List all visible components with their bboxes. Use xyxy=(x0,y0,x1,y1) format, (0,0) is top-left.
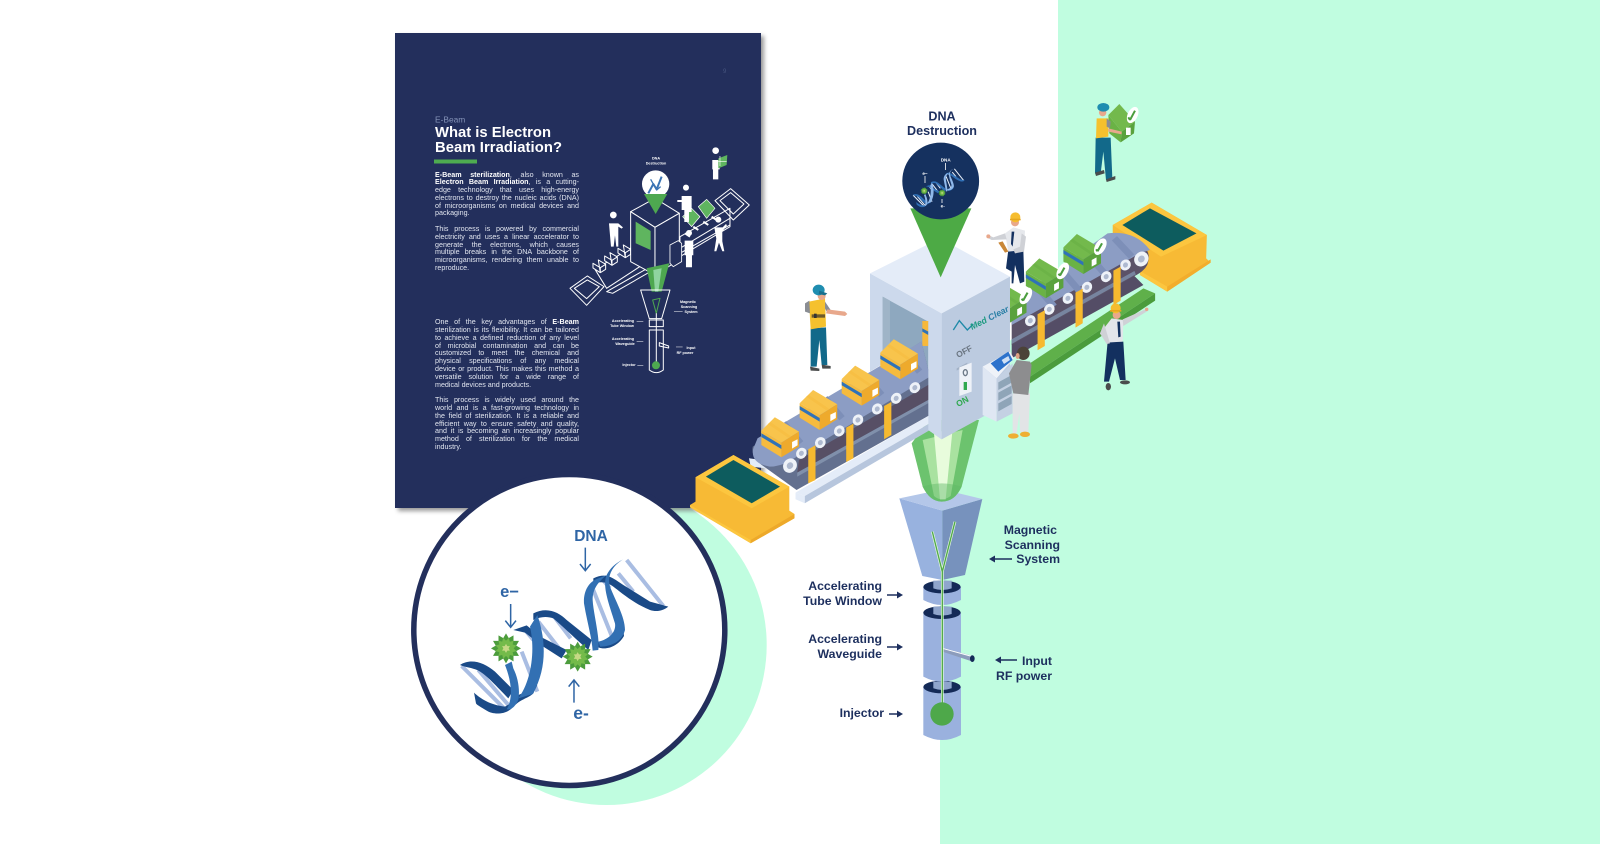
right conveyor xyxy=(989,233,1155,383)
machine labels xyxy=(954,304,1011,409)
paragraph 2: generate the electrons, which causes xyxy=(435,241,579,249)
beam path xyxy=(932,522,955,703)
paragraph 1: of microorganisms on medical devices and xyxy=(435,202,579,210)
paragraph 3: One of the key advantages of E-Beam xyxy=(435,318,579,326)
accelerator labels: Waveguide xyxy=(818,647,882,661)
DNA lens circle xyxy=(414,474,725,786)
DNA helix xyxy=(460,559,668,714)
accelerator labels: Magnetic xyxy=(1004,523,1057,537)
lens labels xyxy=(500,528,608,723)
mini helix labels xyxy=(922,158,951,208)
paragraph 4: and it is becoming an increasingly popular xyxy=(435,427,579,435)
brochure illustration labels: Destruction xyxy=(646,162,667,166)
paragraph 3: to achieve a defined reduction of any level xyxy=(435,334,579,342)
paragraph 2 xyxy=(435,225,579,272)
accelerator arrows xyxy=(887,556,1017,718)
brochure illustration labels: RF power xyxy=(677,351,694,355)
brochure heading: What is Electron xyxy=(435,125,551,141)
machine labels: Med Clear xyxy=(968,304,1011,332)
paragraph 4 xyxy=(435,396,579,451)
left bin xyxy=(690,455,794,543)
paragraph 3: medical devices and products. xyxy=(435,381,531,389)
machine front and top xyxy=(870,238,1010,439)
rail xyxy=(796,415,930,496)
accelerator labels: Tube Window xyxy=(803,594,882,608)
lens labels: e− xyxy=(500,583,519,601)
paragraph 2: microorganisms, rendering them unable to xyxy=(435,256,579,264)
DNA pin circle xyxy=(902,143,979,219)
mini helix labels: e- xyxy=(941,204,945,208)
right bin xyxy=(1113,203,1211,292)
mini helix arrows xyxy=(925,163,946,203)
accelerator labels: RF power xyxy=(996,669,1052,683)
accelerator labels: Scanning xyxy=(1005,538,1060,552)
paragraph 1: edge technology that uses high-energy xyxy=(435,186,579,194)
lens labels: DNA xyxy=(574,528,608,545)
page: brochure xyxy=(395,33,764,511)
green boxes xyxy=(1063,234,1109,274)
worker: carrying green box xyxy=(1095,103,1141,182)
mint background panel xyxy=(940,0,1600,844)
brochure line illustration xyxy=(570,147,749,373)
magnetic funnel and accelerator column xyxy=(899,489,982,740)
lower cylinder xyxy=(923,687,961,740)
mini helix labels: DNA xyxy=(941,158,951,162)
mini helix xyxy=(913,169,965,207)
logo mark xyxy=(953,321,973,330)
paragraph 2: reproduce. xyxy=(435,264,469,272)
brochure illustration labels: Injector xyxy=(622,363,636,367)
RF tube xyxy=(942,648,973,662)
accelerator labels xyxy=(803,523,1060,720)
machine labels: ON xyxy=(954,394,970,409)
brochure illustration labels xyxy=(610,156,698,367)
paragraph 2: multiple breaks in the DNA backbone of xyxy=(435,248,579,256)
brochure illustration labels: Accelerating xyxy=(612,319,634,323)
accelerator labels: Accelerating xyxy=(808,579,882,593)
left conveyor xyxy=(749,339,930,503)
mint circle behind DNA lens xyxy=(447,485,767,805)
accelerator labels: Input xyxy=(1022,654,1052,668)
paragraph 1: packaging. xyxy=(435,209,470,217)
paragraph 3: physical specifications of any medical xyxy=(435,357,579,365)
injector dot xyxy=(930,702,954,726)
paragraph 4: method of sterilization for the medical xyxy=(435,435,579,443)
worker: inspector left xyxy=(805,285,847,371)
paragraph 1: electrons to destroy the nucleic acids (DNA) xyxy=(435,194,579,202)
top cylinder xyxy=(923,587,961,605)
paragraph 3: versatile solution for a wide range of xyxy=(435,373,579,381)
page number: 9 xyxy=(723,69,727,75)
green rule xyxy=(434,160,477,164)
brochure illustration labels: Magnetic xyxy=(680,300,696,304)
paragraph 3: sterilization is its flexibility. It can be tailored xyxy=(435,326,579,334)
paragraph 1: Electron Beam Irradiation, is a cutting- xyxy=(435,178,579,186)
brochure heading: Beam Irradiation? xyxy=(435,140,562,156)
accelerator labels: Accelerating xyxy=(808,632,882,646)
accelerator labels: System xyxy=(1016,552,1060,566)
mid cylinder xyxy=(923,613,961,682)
paragraph 3: device or product. This makes this method a xyxy=(435,365,579,373)
electron beam xyxy=(912,420,979,502)
mini helix labels: e− xyxy=(922,171,928,176)
brochure illustration labels: Scanning xyxy=(681,305,697,309)
paragraph 4: efficient way to ensure safety and quality, xyxy=(435,420,579,428)
paragraph 4: This process is widely used around the xyxy=(435,396,579,404)
worker: manager right xyxy=(1100,303,1148,390)
paragraph 4: the field of sterilization. It is a reliable and xyxy=(435,412,579,420)
funnel xyxy=(899,498,942,580)
DNA Destruction heading: DNA xyxy=(928,110,956,124)
lens labels: e- xyxy=(573,703,589,723)
paragraph 3: of microbial contamination and can be xyxy=(435,342,579,350)
paragraph 3 xyxy=(435,318,579,389)
brochure illustration labels: Tube Window xyxy=(610,324,634,328)
paragraph 3: customized to meet the chemical and xyxy=(435,349,579,357)
paragraph 2: electricity and uses a linear accelerator to xyxy=(435,233,579,241)
paragraph 4: industry. xyxy=(435,443,461,451)
machine back and interior xyxy=(870,273,942,439)
lens arrows xyxy=(505,548,591,703)
brochure illustration labels: DNA xyxy=(652,156,660,160)
paragraph 4: world and is a fast-growing technology in xyxy=(435,404,579,412)
paragraph 2: This process is powered by commercial xyxy=(435,225,579,233)
paragraph 1 xyxy=(435,170,579,217)
machine labels: OFF xyxy=(954,343,974,360)
DNA Destruction heading: Destruction xyxy=(907,124,977,138)
DNA pin triangle xyxy=(910,208,971,277)
power switch xyxy=(957,363,967,371)
console and operator xyxy=(983,347,1032,439)
brochure eyebrow: E-Beam xyxy=(435,114,465,124)
brochure illustration labels: Input xyxy=(686,346,696,350)
yellow boxes xyxy=(761,417,799,457)
accelerator labels: Injector xyxy=(840,706,884,720)
brochure illustration labels: System xyxy=(684,310,698,314)
paragraph 1: E-Beam sterilization, also known as xyxy=(435,170,579,178)
worker: supervisor with clipboard xyxy=(986,212,1026,283)
brochure illustration labels: Accelerating xyxy=(612,337,634,341)
brochure illustration labels: Waveguide xyxy=(615,342,635,346)
